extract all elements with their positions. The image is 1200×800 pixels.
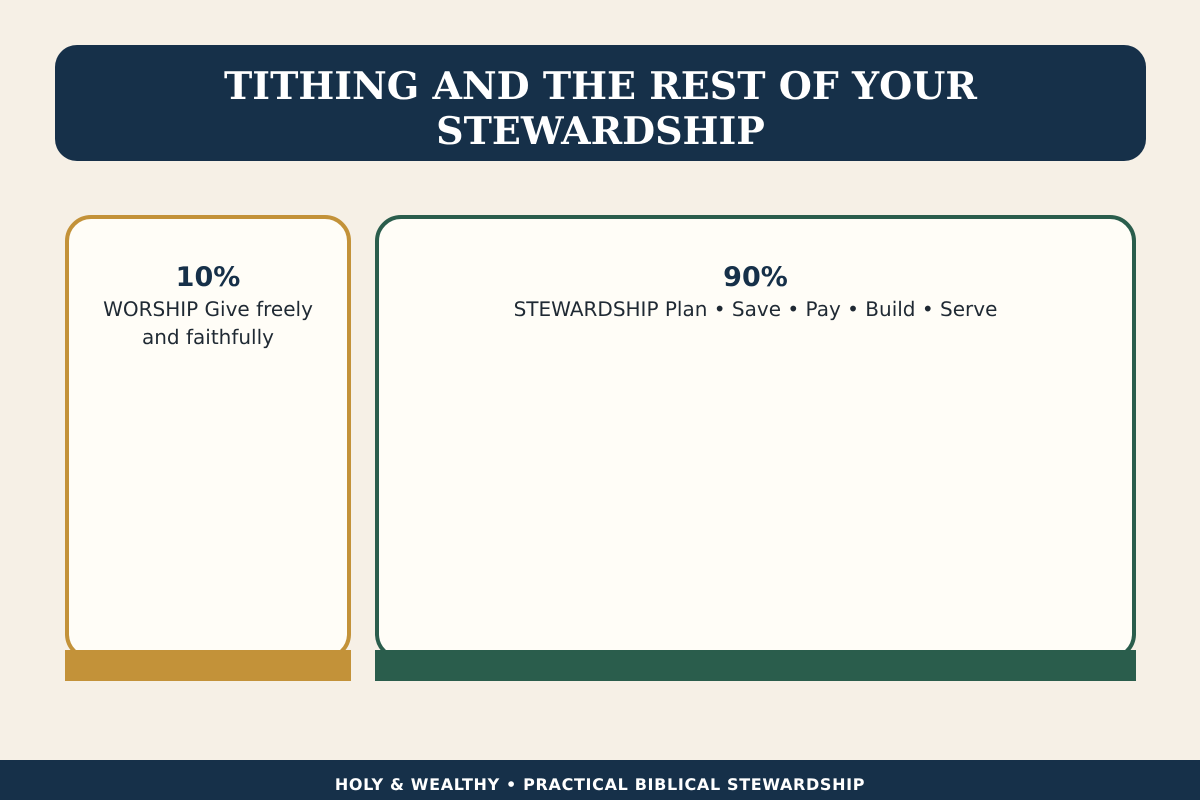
text: worship description: [103, 297, 313, 349]
percentage: 10%: 10%: [176, 262, 240, 293]
text: worship description: WORSHIP Give freely: [103, 297, 313, 321]
panel: 90% stewardship: [375, 215, 1136, 681]
footer text: HOLY & WEALTHY • PRACTICAL BIBLICAL STEWARDSHIP: [335, 775, 865, 794]
percentage: 90%: 90%: [723, 262, 788, 293]
title banner: [55, 45, 1146, 161]
title: TITHING AND THE REST OF YOUR: [224, 63, 977, 108]
card frame: [65, 215, 351, 660]
card frame: [375, 215, 1136, 660]
text: worship description: and faithfully: [142, 325, 274, 349]
bar: worship base: [65, 650, 351, 681]
footer band: [0, 760, 1200, 800]
panel: 10% worship: [65, 215, 351, 681]
title: [224, 63, 978, 153]
bar: stewardship base: [375, 650, 1136, 681]
text: stewardship description: STEWARDSHIP Plan • Save • Pay • Build • Serve: [514, 297, 997, 321]
title: STEWARDSHIP: [436, 108, 765, 153]
